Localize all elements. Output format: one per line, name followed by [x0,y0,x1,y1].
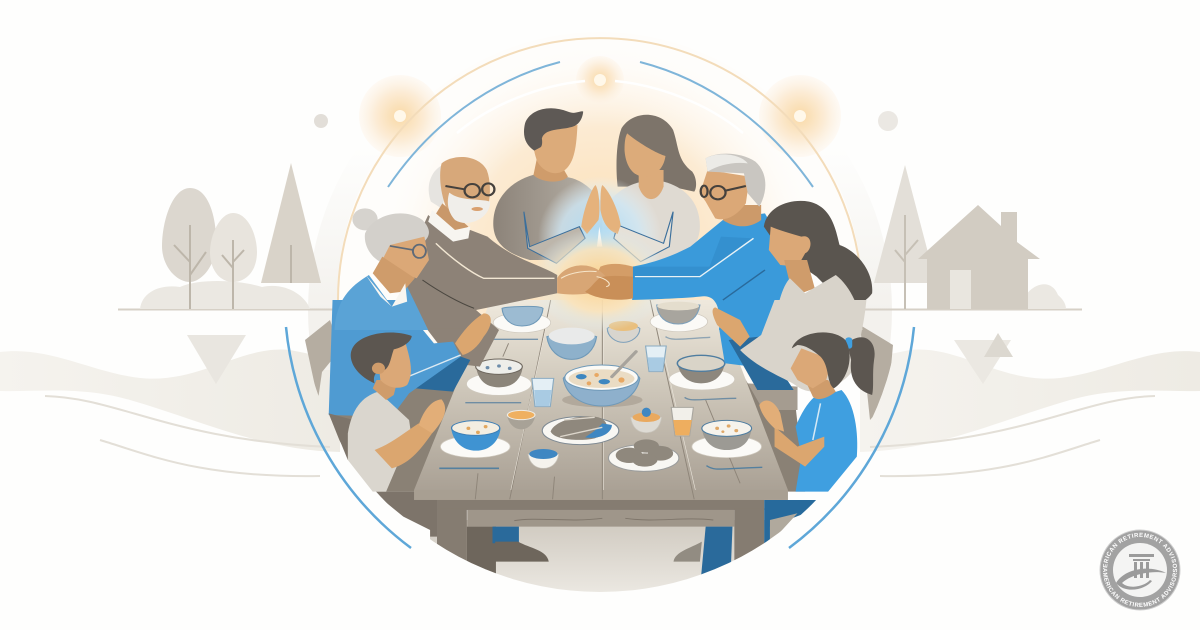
woman neck [639,170,664,199]
chair left [305,320,332,396]
boy legs [373,492,437,537]
man neck [533,157,568,182]
right spoon [685,397,736,400]
right hand front [585,276,633,300]
top left plate with blue bowl [493,306,551,333]
man torso [493,174,602,260]
neck [784,260,815,293]
elder man in blue [632,154,799,367]
bald head [440,157,490,217]
man face [533,125,577,173]
glass top right [646,346,666,372]
blue soup bowl and plate [440,421,510,458]
seat fill left [328,386,456,492]
grey hair [706,154,765,207]
scene floor and seats [305,320,893,600]
sun glow centre [576,56,624,104]
left hand [557,265,608,295]
small bowl fruit [631,408,662,433]
neck [723,205,761,226]
right hand back [597,264,633,287]
girl legs [764,500,816,544]
mouth [471,207,483,211]
glowing dots [394,74,806,122]
sweater [329,300,461,417]
arm [775,427,824,467]
hand glow [538,176,662,300]
table edge [414,490,788,500]
praying hand [455,313,491,355]
small snack bowl [607,321,640,342]
left plate and bowl [466,359,532,395]
bottom right fork [706,466,762,469]
wave band right [860,350,1200,476]
sun glow left [359,75,441,157]
sun glow right [759,75,841,157]
neck [373,380,398,400]
neck [373,257,415,293]
man hair [524,108,583,151]
badge top text: AMERICAN RETIREMENT ADVISORS [1103,532,1177,568]
centre soup bowl [562,352,643,407]
hair [764,201,872,312]
dishes on table [439,302,762,471]
right praying hand [600,185,621,234]
glasses [390,245,426,258]
left sleeve [524,212,585,263]
crossbar [467,510,734,527]
boy [348,332,445,492]
beard [448,193,490,223]
left praying hand [581,185,599,234]
landscape left: trees [140,163,321,309]
halo glow [375,37,825,487]
shirt [796,390,857,492]
blue arcs top [388,62,813,187]
hair bun [352,208,378,230]
praying hand [713,307,750,347]
horizon line [118,308,1082,310]
grandmother [329,300,491,460]
orange juice glass [671,407,693,436]
hand clasp glow [532,228,668,332]
left cutlery [491,337,538,341]
seat fill right [746,380,805,492]
face [700,170,750,219]
sweater shoulders [334,275,428,330]
left knife [465,401,521,405]
blue body and arm [632,213,799,330]
right cutlery top [665,337,710,339]
ponytail [847,337,875,395]
bottom left cutlery [439,466,499,471]
top right plate with bowl [650,302,708,332]
white hair side [429,165,451,208]
badge centre [1113,543,1167,597]
inner backdrop [339,254,822,332]
table shadow under top [437,499,764,510]
blueberries dish [528,449,559,468]
small bowl orange [507,410,535,429]
woman face [625,133,665,177]
face [377,342,411,388]
face [769,227,810,267]
woman hair [616,115,696,192]
right leg [734,508,764,560]
orange outer arc [338,38,862,300]
hand [419,399,445,433]
neck [805,380,836,399]
table top [414,300,788,490]
praying hands couple arms [524,185,673,263]
outer pale ring [308,234,892,370]
light beam [597,227,602,247]
young woman right [764,201,872,330]
right plate and bowl [669,355,735,390]
glasses [445,183,494,197]
shirt [348,392,411,492]
lower body [426,328,499,367]
chair right [860,325,893,420]
left glass [532,378,554,407]
clasped hands [557,264,633,300]
head back hair [365,213,429,263]
collar [428,210,470,242]
badge pillar icon [1116,554,1166,590]
shirt [775,275,863,330]
right plate rice bowl [692,420,762,458]
dumpling bowl [547,328,597,359]
left leg [437,510,467,561]
face [382,237,429,278]
right sleeve [614,212,673,262]
down triangle right [954,340,1011,384]
lap dark blue [729,337,794,390]
decorative dot right [878,111,898,131]
down triangle left [187,335,246,384]
wave band left [0,350,340,476]
lap dark blue [396,357,470,392]
man and woman at back [493,108,700,263]
neck [432,203,468,237]
trousers and shoes [466,526,496,574]
badge ring [1100,530,1180,610]
badge bottom text: AMERICAN RETIREMENT ADVISORS [1103,568,1178,607]
grandfather [401,157,557,367]
hair [351,332,412,383]
plank lines [475,300,740,499]
grandfather body and arm [401,215,557,330]
face [791,348,832,388]
landscape right: tree and house [874,165,1066,309]
decorative dot left [314,114,328,128]
woman torso [604,182,700,263]
hair [792,332,850,388]
biscuits plate [608,439,679,471]
fish platter [542,416,619,445]
glasses [701,186,746,199]
up triangle right [984,333,1013,357]
collar [366,275,407,307]
table [329,300,828,587]
girl [759,332,875,492]
lower blue body [719,328,776,367]
hand [759,400,784,432]
arm [375,423,432,468]
white arcs top [457,81,743,133]
lower blue arcs [286,327,914,548]
shirt lower [740,300,866,392]
